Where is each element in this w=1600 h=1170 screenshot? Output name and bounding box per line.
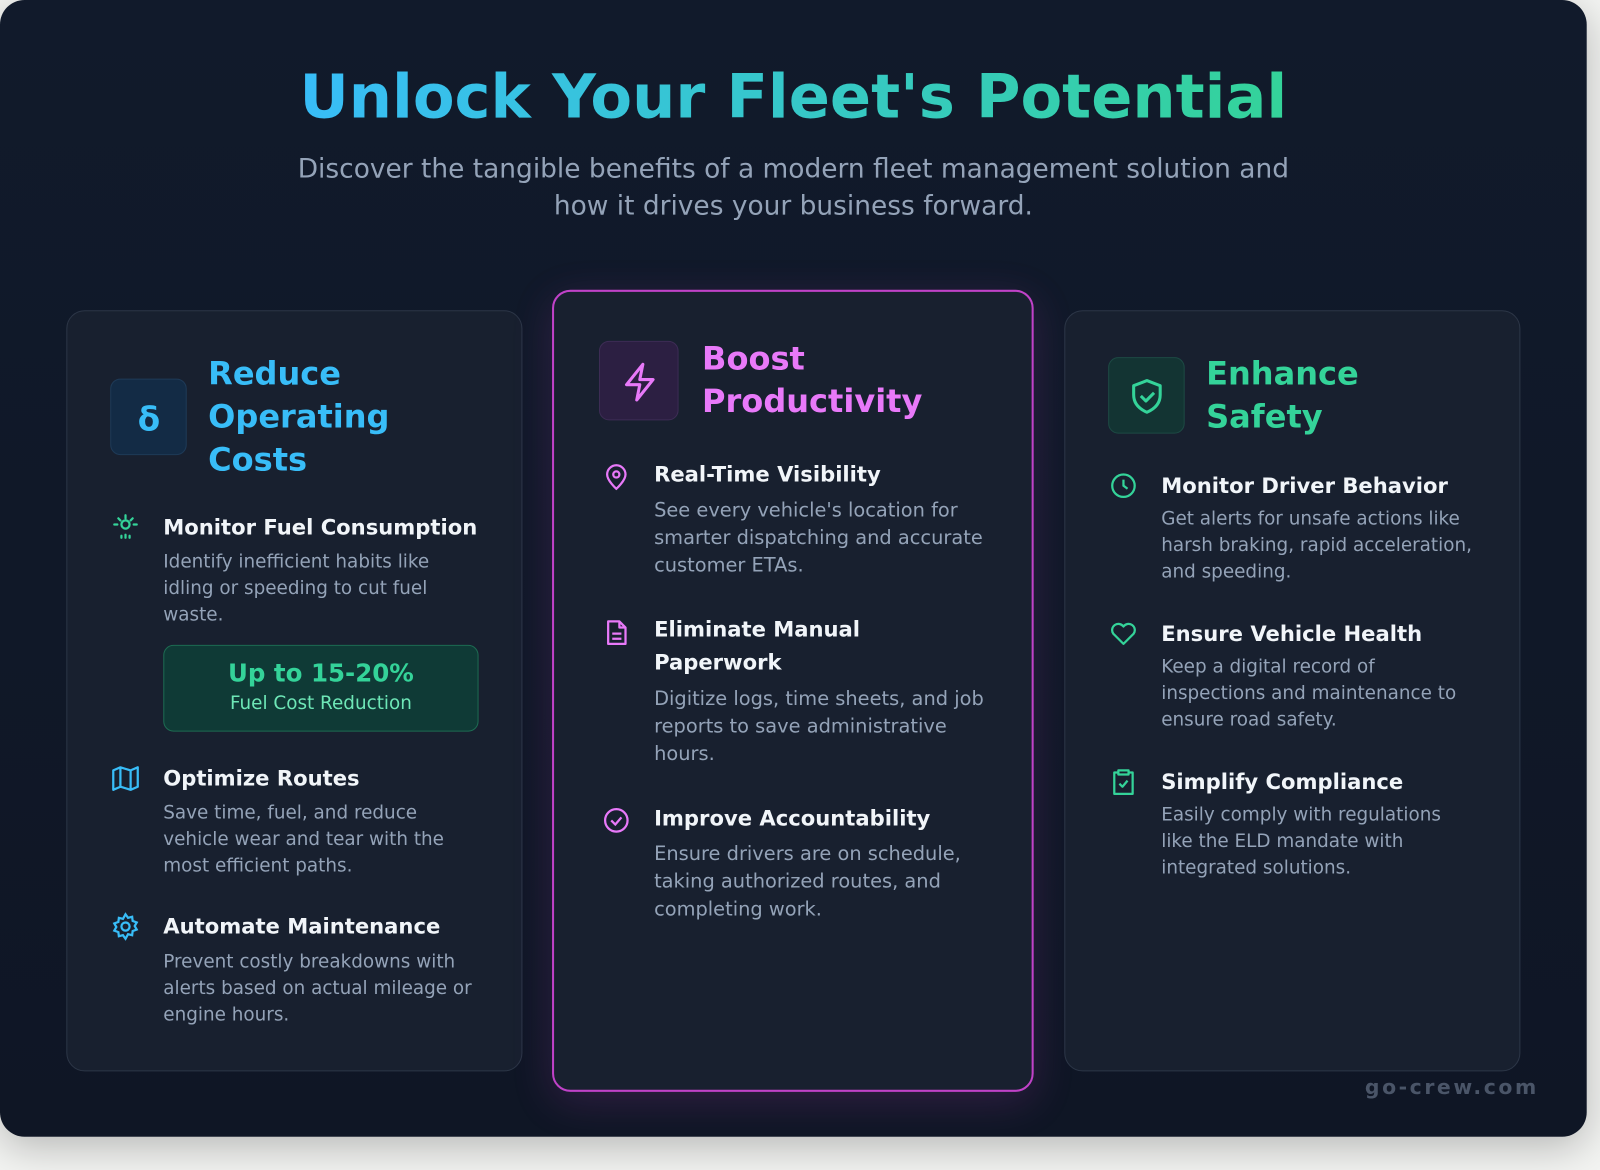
- callout: fuel savings: [163, 645, 479, 732]
- panel: boost productivity: hours.: [654, 743, 715, 765]
- panel: enhance safety: like the ELD mandate with: [1161, 831, 1403, 852]
- icon: cost: ẟ: [138, 401, 160, 439]
- item: eliminate paperwork: [654, 617, 860, 674]
- item: monitor fuel: Monitor Fuel Consumption: [163, 515, 477, 540]
- panel: boost productivity: smarter dispatching and accurate: [654, 527, 983, 549]
- panel: enhance safety: Easily comply with regulations: [1161, 804, 1441, 826]
- icon: document: [607, 620, 627, 645]
- item: compliance: Simplify Compliance: [1161, 769, 1403, 794]
- subtitle: how it drives your business forward.: [554, 191, 1033, 221]
- item: accountability: Improve Accountability: [654, 806, 930, 831]
- panel: enhance safety: Keep a digital record of: [1161, 656, 1375, 678]
- panel: reduce operating costs: most efficient paths.: [163, 855, 352, 877]
- panel: enhance safety: [1064, 310, 1520, 1071]
- subtitle: Discover the tangible benefits of a modern fleet management solution and: [298, 154, 1289, 185]
- panel: boost productivity: Digitize logs, time sheets, and job: [654, 688, 984, 710]
- icon: shield: [1108, 357, 1185, 434]
- watermark: go-crew.com: [1365, 1074, 1539, 1099]
- title: Unlock Your Fleet's Potential: [299, 62, 1287, 133]
- heading: Reduce: [208, 356, 341, 393]
- heading: Safety: [1206, 399, 1323, 436]
- panel: boost productivity: customer ETAs.: [654, 554, 804, 577]
- panel: boost productivity: [552, 290, 1034, 1092]
- panel: reduce operating costs: waste.: [163, 604, 223, 626]
- panel: enhance safety: harsh braking, rapid acceleration,: [1161, 535, 1472, 556]
- heading: Boost: [702, 341, 805, 378]
- panel: enhance safety: inspections and maintenance to: [1161, 683, 1456, 704]
- heading: Operating: [208, 399, 389, 436]
- icon: pin: [606, 464, 627, 490]
- heading: [702, 341, 922, 420]
- panel: reduce operating costs: vehicle wear and tear with the: [163, 829, 444, 850]
- panel: boost productivity: reports to save administrative: [654, 715, 947, 738]
- panel: reduce operating costs: engine hours.: [163, 1004, 289, 1026]
- icon: gear: [112, 912, 138, 941]
- panel: reduce operating costs: idling or speeding to cut fuel: [163, 578, 427, 599]
- icon: lightning: [599, 341, 679, 420]
- item: automate maintenance: Automate Maintenance: [163, 914, 440, 939]
- callout: fuel savings: Up to 15-20%: [228, 659, 414, 688]
- icon: heart: [1111, 622, 1136, 646]
- icon: map: [112, 766, 139, 791]
- icon: clipboard: [1113, 769, 1134, 795]
- panel: enhance safety: integrated solutions.: [1161, 857, 1351, 879]
- heading: Enhance: [1206, 356, 1359, 393]
- panel: boost productivity: See every vehicle's location for: [654, 499, 958, 521]
- heading: Costs: [208, 442, 307, 479]
- icon: check circle: [604, 808, 629, 833]
- panel: reduce operating costs: [66, 310, 522, 1071]
- item: optimize routes: Optimize Routes: [163, 766, 360, 791]
- icon: cost: [110, 379, 187, 455]
- item: vehicle health: Ensure Vehicle Health: [1161, 621, 1422, 646]
- panel: boost productivity: taking authorized routes, and: [654, 870, 941, 893]
- item: real-time visibility: Real-Time Visibility: [654, 462, 881, 487]
- callout: fuel savings: Fuel Cost Reduction: [230, 693, 412, 714]
- panel: enhance safety: and speeding.: [1161, 561, 1291, 583]
- item: driver behavior: Monitor Driver Behavior: [1161, 473, 1448, 498]
- panel: enhance safety: Get alerts for unsafe actions like: [1161, 508, 1460, 530]
- panel: reduce operating costs: Prevent costly breakdowns with: [163, 951, 455, 972]
- panel: reduce operating costs: Identify inefficient habits like: [163, 551, 429, 572]
- heading: [208, 356, 389, 479]
- panel: boost productivity: completing work.: [654, 898, 822, 920]
- item: eliminate paperwork: Eliminate Manual: [654, 617, 860, 642]
- heading: [1206, 356, 1359, 436]
- icon: fuel: [113, 514, 138, 539]
- heading: Productivity: [702, 384, 922, 420]
- item: eliminate paperwork: Paperwork: [654, 650, 782, 674]
- panel: reduce operating costs: Save time, fuel, and reduce: [163, 802, 417, 823]
- panel: boost productivity: Ensure drivers are on schedule,: [654, 843, 961, 865]
- panel: reduce operating costs: alerts based on actual mileage or: [163, 978, 472, 999]
- panel: enhance safety: ensure road safety.: [1161, 709, 1337, 731]
- subtitle: [298, 154, 1289, 221]
- icon: clock: [1111, 473, 1136, 498]
